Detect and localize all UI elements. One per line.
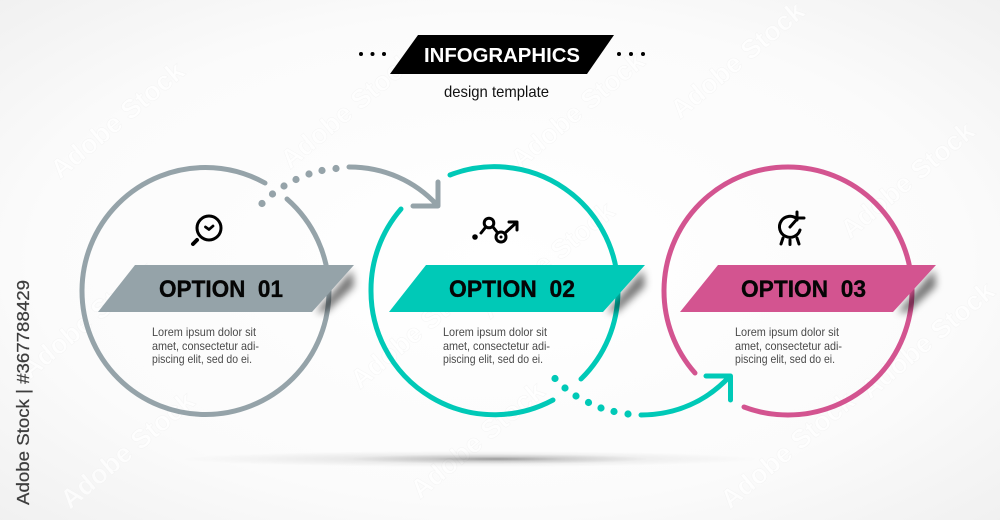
icon: target with legs — [779, 212, 804, 244]
text block 02: amet, consectetur adi- — [443, 339, 550, 353]
watermark pattern: Adobe Stock — [835, 115, 981, 245]
watermark pattern: Adobe Stock — [715, 385, 861, 515]
watermark pattern: Adobe Stock — [55, 385, 201, 515]
circle ring 01 — [82, 168, 329, 414]
banner shadow 03 — [898, 270, 936, 312]
watermark pattern: Adobe Stock — [45, 55, 191, 185]
watermark pattern: Adobe Stock — [505, 45, 651, 175]
watermark pattern: Adobe Stock — [15, 255, 161, 385]
text block 03: Lorem ipsum dolor sit — [735, 325, 840, 339]
ground shadow — [180, 451, 760, 467]
title banner — [390, 35, 614, 74]
title banner: INFOGRAPHICS — [424, 44, 580, 67]
circle ring 03 — [664, 167, 912, 415]
watermark pattern: Adobe Stock — [275, 45, 421, 175]
watermark pattern: Adobe Stock — [405, 375, 551, 505]
title dots left — [359, 52, 386, 56]
text block 01: Lorem ipsum dolor sit — [152, 325, 257, 339]
text block 01 — [152, 325, 259, 366]
text block 01: piscing elit, sed do ei. — [152, 352, 252, 366]
text block 03: piscing elit, sed do ei. — [735, 352, 835, 366]
heading 03: OPTION 03 — [741, 276, 866, 303]
panel: option 02 — [371, 167, 645, 415]
banner shadow 02 — [607, 270, 645, 312]
banner shadow 01 — [316, 270, 354, 312]
text block 03 — [735, 325, 842, 366]
arrow: dotted connector 01 to 02 — [258, 165, 438, 207]
icon: chart line with arrow — [474, 218, 517, 242]
banner 02 — [389, 265, 645, 312]
icon: magnifier with check — [193, 216, 221, 244]
text block 02: piscing elit, sed do ei. — [443, 352, 543, 366]
watermark pattern: Adobe Stock — [345, 265, 491, 395]
text block 03: amet, consectetur adi- — [735, 339, 842, 353]
arrow: dotted connector 02 to 03 — [551, 375, 730, 418]
title dots right — [617, 52, 645, 56]
panel: option 03 — [664, 167, 936, 415]
watermark pattern: Adobe Stock — [475, 195, 621, 325]
heading 02: OPTION 02 — [449, 276, 575, 303]
banner 01 — [98, 265, 354, 312]
stock id side text: Adobe Stock | #367788429 — [13, 280, 33, 505]
circle ring 02 — [371, 167, 618, 415]
watermark pattern: Adobe Stock — [855, 275, 1000, 405]
banner 03 — [680, 265, 936, 312]
subtitle: design template — [444, 84, 549, 101]
heading 01: OPTION 01 — [159, 276, 283, 303]
text block 02 — [443, 325, 550, 366]
text block 01: amet, consectetur adi- — [152, 339, 259, 353]
text block 02: Lorem ipsum dolor sit — [443, 325, 548, 339]
panel: option 01 — [82, 168, 354, 414]
